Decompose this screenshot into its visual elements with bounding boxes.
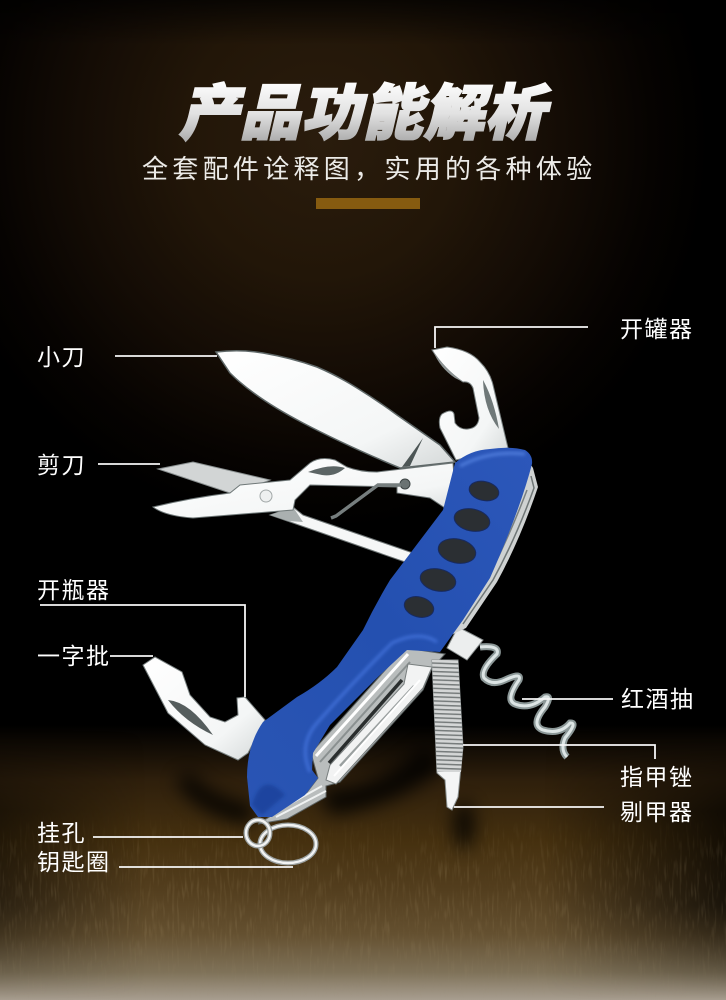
label: small knife: 小刀 [37, 344, 86, 370]
key rings [246, 820, 316, 863]
tool: bottle opener and flat screwdriver [143, 657, 265, 760]
handle grip buttons [402, 479, 501, 621]
label: scissors: 剪刀 [37, 452, 86, 478]
multi-tool illustration [143, 347, 573, 863]
label: hanging hole: 挂孔 [37, 820, 86, 846]
knife cast shadows on floor [176, 745, 474, 849]
label: corkscrew: 红酒抽 [621, 686, 694, 712]
tool: corkscrew [447, 627, 573, 757]
callout lines [40, 327, 655, 867]
tool: nail file and cuticle pick [432, 660, 463, 810]
handle side liners [440, 455, 538, 640]
tool: scissors [153, 459, 455, 518]
label: cuticle pick: 剔甲器 [620, 799, 694, 825]
label: bottle opener: 开瓶器 [37, 577, 110, 603]
tool: peeler and metal frame [258, 648, 445, 824]
tool: scissors lower handle [270, 507, 413, 563]
blue handle [247, 448, 532, 817]
label: flat screwdriver: 一字批 [37, 643, 110, 669]
label: nail file: 指甲锉 [620, 764, 694, 790]
subtitle: 全套配件诠释图，实用的各种体验 [142, 154, 597, 184]
title: 产品功能解析 [176, 80, 559, 147]
label: can opener: 开罐器 [620, 316, 694, 342]
tool: small knife blade [216, 351, 455, 468]
accent bar [316, 198, 420, 209]
tool: can opener [432, 347, 508, 460]
label: key ring: 钥匙圈 [37, 849, 110, 875]
